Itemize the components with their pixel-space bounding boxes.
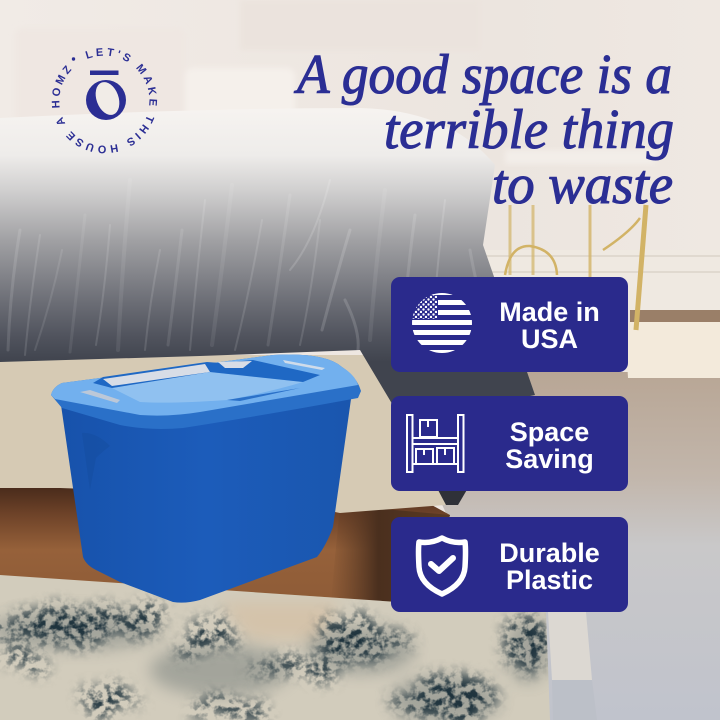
lid rim [51, 354, 361, 429]
baseboard [484, 250, 720, 310]
label: Plastic [506, 565, 593, 595]
bin body [61, 392, 352, 603]
badge: Space Saving [391, 396, 628, 491]
title: A good space is a [293, 44, 672, 106]
bin handle recess [82, 433, 110, 490]
light wood floor [440, 372, 720, 720]
comforter creases [8, 180, 505, 370]
bed skirt [0, 355, 462, 513]
floor strip by rug [548, 612, 592, 680]
label: Durable [499, 538, 600, 568]
lid center panel [112, 372, 303, 403]
wood strip and sunlight patch [630, 310, 720, 322]
badge: Durable Plastic [391, 517, 628, 612]
headboard and pillows [15, 0, 480, 126]
logo badge: LET'S MAKE THIS HOUSE A HOMZ [52, 48, 158, 154]
storage bin [51, 354, 361, 603]
icon: shield check [418, 538, 466, 594]
icon: shelves with boxes [407, 415, 464, 472]
label: USA [521, 324, 578, 354]
badge: Made in USA [391, 277, 628, 372]
lid label slots [103, 364, 210, 386]
title: to waste [492, 154, 673, 216]
title [293, 44, 674, 216]
rug [0, 570, 552, 720]
icon: US flag [412, 293, 472, 353]
side table top [505, 150, 655, 164]
label: Space [510, 417, 589, 447]
lid top [51, 354, 358, 416]
title: terrible thing [384, 99, 674, 161]
dark wood floor [0, 485, 450, 615]
label: Made in [499, 297, 600, 327]
label: Saving [505, 444, 594, 474]
lid recess [93, 360, 320, 388]
bed comforter [0, 108, 535, 490]
bed corner shadow [437, 488, 468, 505]
gold side table [505, 205, 646, 330]
